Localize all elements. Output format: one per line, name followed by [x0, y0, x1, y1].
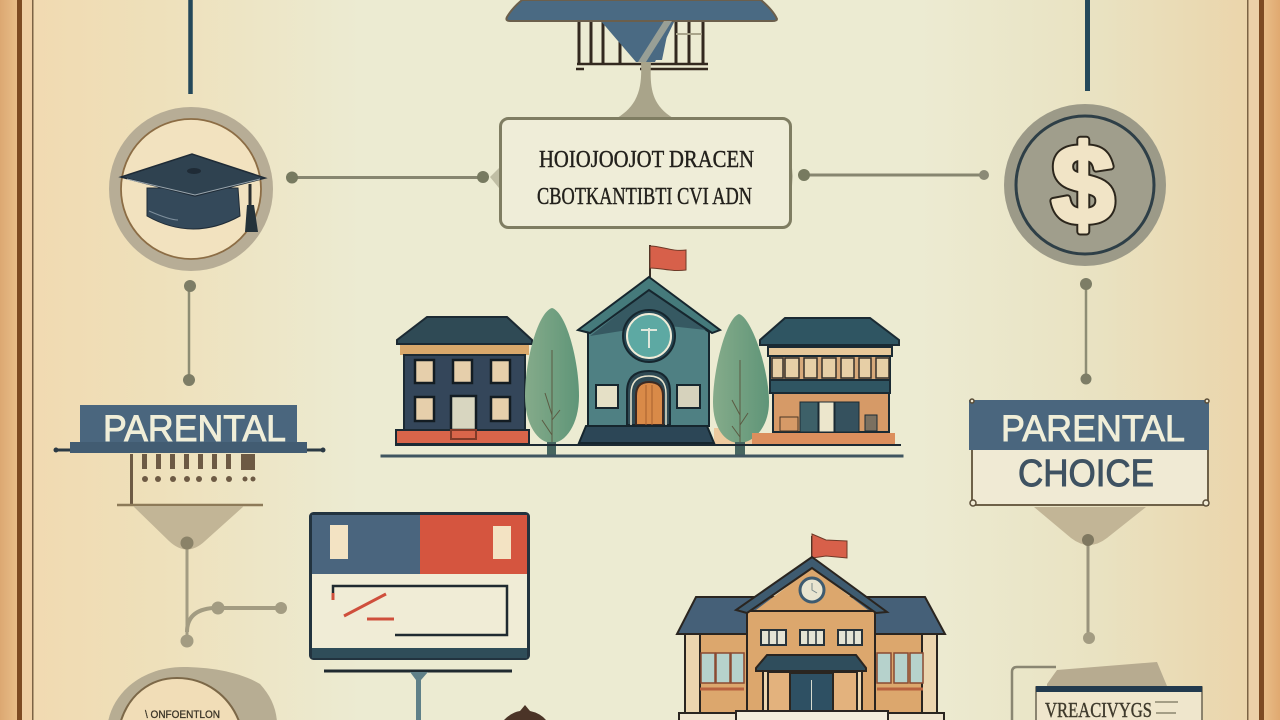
left parental banner: [54, 405, 326, 453]
icon: graduation cap: [115, 113, 267, 265]
monitor cards: [330, 525, 511, 559]
sign label: parental: PARENTAL: [1001, 408, 1185, 449]
monitor: [310, 514, 528, 658]
stem into text box: [617, 62, 673, 118]
icon: dollar coin: $: [1052, 122, 1114, 247]
box text line 2: CBOTKANTIBTI CVI ADN: [537, 184, 752, 210]
right funnel connector: [1034, 507, 1146, 644]
left school building: [396, 317, 532, 444]
top left vertical line: [188, 0, 193, 94]
arched door: [627, 371, 670, 425]
ground lines: [382, 445, 902, 456]
top roof with columns: [506, 0, 777, 69]
banner label: PARENTAL: [103, 408, 286, 449]
right parental choice sign: [969, 399, 1209, 506]
left funnel and branch connector: [117, 505, 287, 648]
side windows: [701, 653, 923, 683]
upper windows: [772, 358, 889, 378]
bottom left medallion: [108, 667, 277, 720]
monitor bracket: [333, 586, 507, 635]
side windows: [596, 385, 700, 408]
bottom ornament: [504, 705, 546, 720]
monitor stand: [324, 671, 512, 720]
top right vertical line: [1085, 0, 1090, 91]
right connector: [792, 168, 989, 186]
flag: [650, 245, 686, 277]
right connector below coin: [1080, 278, 1092, 384]
document lines: [1155, 702, 1178, 713]
bottom right document: [1012, 662, 1202, 720]
sign label: choice: CHOICE: [1018, 453, 1154, 495]
left connector below cap: [183, 280, 196, 386]
icon: dollar coin: [1004, 104, 1166, 266]
text box: [500, 118, 790, 228]
box text line 1: HOIOJOOJOT DRACEN: [539, 147, 754, 173]
left connector: [286, 168, 499, 188]
left dashed fringe: [130, 454, 256, 504]
left tree: [525, 308, 579, 455]
flag: [812, 534, 847, 558]
upper window bars: [769, 631, 854, 644]
right school building: [752, 318, 899, 444]
large school building: [677, 534, 945, 720]
upper windows: [761, 630, 862, 645]
rose window: [623, 310, 675, 362]
right tree: [713, 314, 769, 455]
portico: [756, 655, 866, 712]
windows: [415, 360, 510, 430]
pale ground wash: [714, 428, 755, 444]
red marks: [333, 593, 394, 619]
clock: [800, 578, 824, 602]
central school building: [578, 245, 720, 443]
lower doors: [780, 402, 877, 432]
sign corners: [970, 399, 1209, 506]
icon: dollar coin: $: [1052, 122, 1114, 247]
